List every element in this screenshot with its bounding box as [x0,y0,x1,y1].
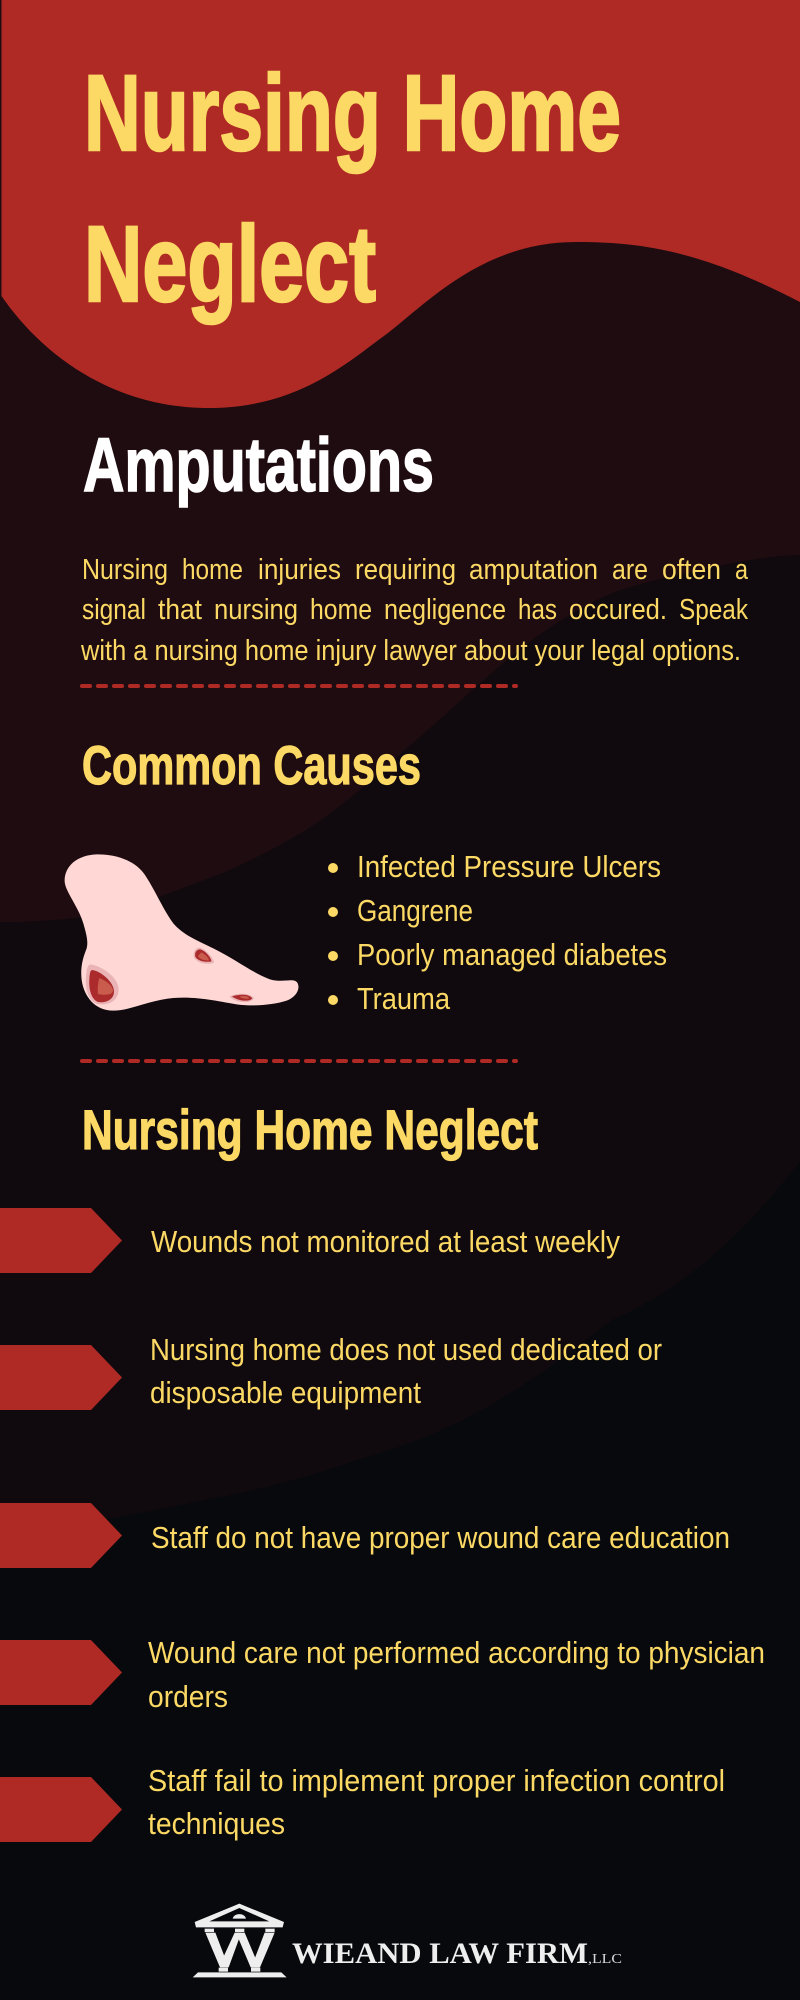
intro paragraph: home [310,594,372,626]
list: common causes: Gangrene [357,893,473,928]
logo: Wieand Law Firm: WIEAND LAW FIRM [292,1937,588,1970]
intro paragraph: a [735,554,749,586]
list: common causes: Trauma [357,981,451,1016]
item 5: techniques [148,1806,285,1841]
heading: nursing home neglect: Nursing Home Neglect [82,1098,538,1161]
logo: Wieand Law Firm: ,LLC [588,1952,622,1967]
title: Nursing Home [84,52,621,173]
list: common causes: Infected Pressure Ulcers [357,849,661,884]
item 4 [0,1635,765,1714]
item 5 [0,1763,725,1842]
intro paragraph: home [182,554,243,586]
intro paragraph: that [158,594,202,626]
list: common causes: Poorly managed diabetes [357,937,667,972]
title: Neglect [84,203,376,324]
item 2 [0,1332,662,1410]
item 5: Staff fail to implement proper infection control [148,1763,725,1798]
item 3: Staff do not have proper wound care education [151,1520,730,1555]
intro paragraph: signal [82,594,146,626]
item 3 [0,1503,730,1568]
intro paragraph: has [518,594,557,626]
intro paragraph: injuries [258,554,341,586]
item 2: disposable equipment [150,1375,421,1410]
intro paragraph [80,554,749,667]
heading: amputations: Amputations [83,423,434,508]
icon: courthouse W [193,1904,287,1977]
intro paragraph: negligence [384,594,506,626]
item 1 [0,1208,620,1273]
intro paragraph: nursing [214,594,298,626]
heading: common causes: Common Causes [82,734,421,796]
icon: wounded foot [65,854,298,1011]
intro paragraph: requiring [355,554,456,586]
intro paragraph: are [612,554,648,586]
title [84,52,621,324]
intro paragraph: Nursing [82,554,168,586]
item 2: Nursing home does not used dedicated or [150,1332,662,1367]
intro paragraph: Speak [679,594,748,626]
intro paragraph: occured. [569,594,667,626]
item 1: Wounds not monitored at least weekly [151,1224,620,1259]
header wave [2,0,800,408]
logo: Wieand Law Firm [193,1904,622,1977]
intro paragraph: amputation [469,554,598,586]
intro paragraph: often [662,554,721,586]
list: common causes [328,849,667,1016]
item 4: orders [148,1679,228,1714]
